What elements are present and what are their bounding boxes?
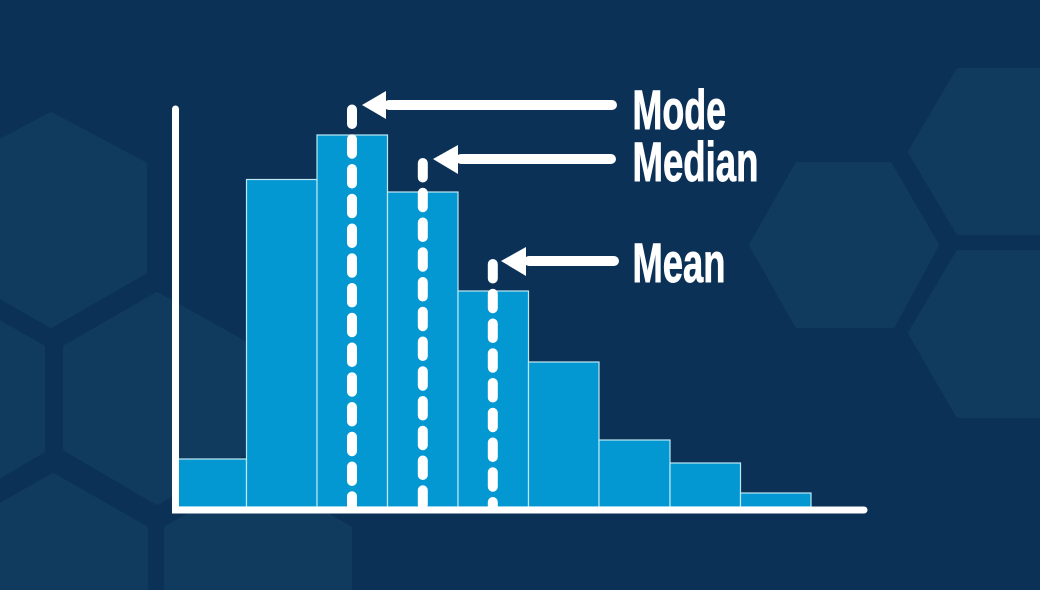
histogram bars — [178, 135, 811, 507]
arrow: mean — [501, 247, 619, 276]
arrow: median — [433, 145, 616, 174]
label: Mean: Mean — [632, 231, 726, 294]
dashed line: median — [418, 163, 428, 506]
dashed line: mean — [488, 264, 498, 506]
label: Mode: Mode — [632, 78, 726, 141]
chart axes — [176, 109, 864, 510]
dashed line: mode — [347, 110, 357, 506]
label: Median: Median — [632, 130, 758, 193]
arrow: mode — [362, 91, 617, 119]
